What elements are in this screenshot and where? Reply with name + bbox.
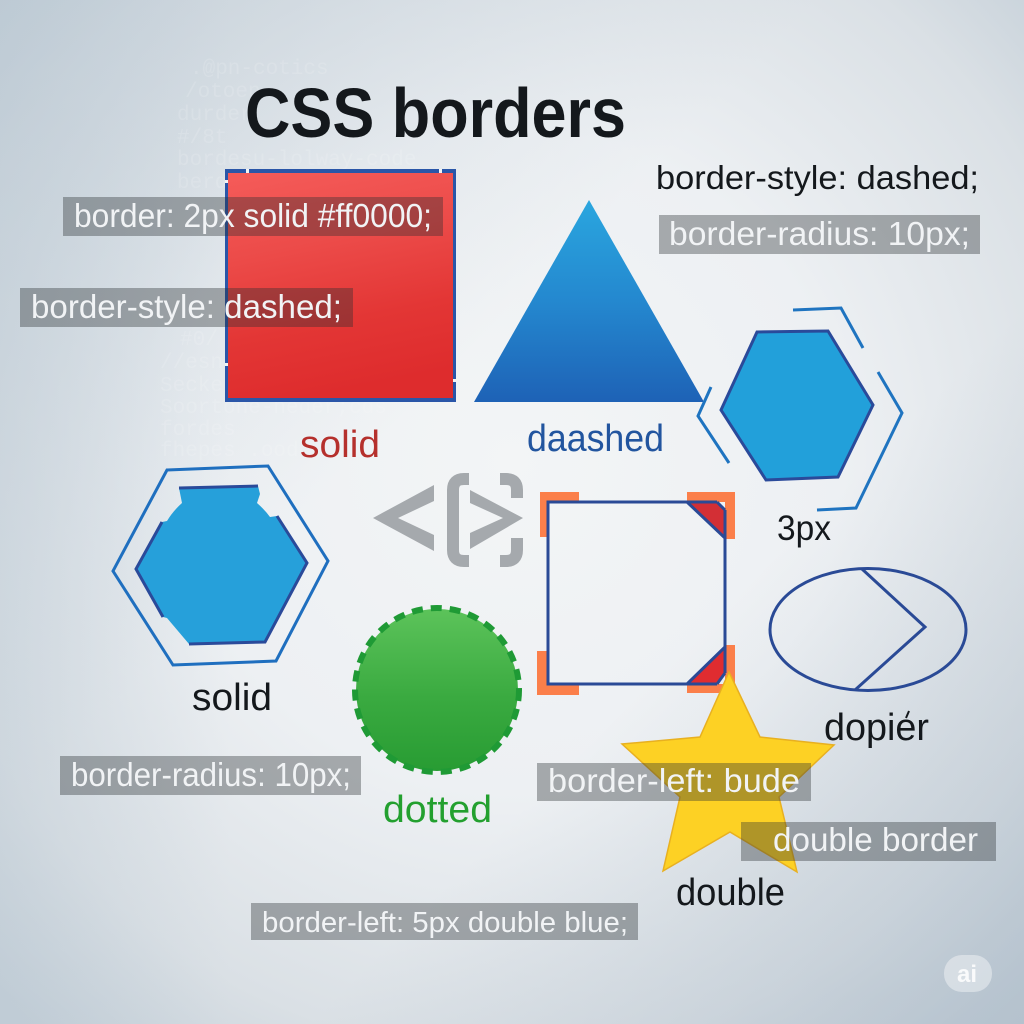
caption: double: double [676, 872, 785, 914]
badge: ai: ai [957, 961, 977, 988]
badge: ai [944, 955, 992, 992]
square with orange corners and red triangles [537, 492, 735, 695]
faint code backdrop: //esne [160, 352, 236, 375]
blue triangle [474, 200, 704, 402]
caption: solid red: solid [300, 424, 380, 466]
label: border-radius top right: border-radius: 10px; [669, 215, 970, 252]
label: border 2px solid: border: 2px solid #ff0000; [74, 197, 432, 234]
faint code backdrop: Secker [160, 375, 236, 398]
yellow star [622, 672, 834, 872]
caption: solid black: solid [192, 677, 272, 719]
caption: 3px: 3px [777, 509, 831, 548]
faint code backdrop: /otoen [185, 81, 261, 104]
faint code backdrop: bordesu-lolway-code [177, 149, 416, 172]
faint code backdrop: #0/ [180, 329, 218, 352]
label: double border: double border [773, 821, 978, 858]
caption: dopier: dopier [824, 707, 929, 749]
label: border-left 5px double blue: border-left: 5px double blue; [262, 907, 628, 939]
caption: dotted: dotted [383, 789, 492, 831]
label: border-left bude: border-left: bude [548, 762, 800, 799]
faint code backdrop: #/8t [177, 127, 227, 150]
green circle with dashed border [355, 608, 519, 772]
heading: border-style dashed: border-style: dashed; [656, 159, 979, 196]
right hexagon with broken outline [698, 308, 902, 510]
faint code backdrop: durder [177, 104, 253, 127]
faint code backdrop: fordes [160, 419, 236, 442]
red square with blue border [225, 169, 456, 402]
faint code backdrop: berd [177, 172, 227, 195]
icon: code brackets [373, 479, 523, 561]
label: border-style dashed: border-style: dashed; [31, 288, 342, 325]
faint code backdrop: Soortone-neder;cds [160, 397, 387, 420]
ellipse with chevron [770, 568, 966, 690]
label: border-radius lower left: border-radius: 10px; [71, 756, 351, 793]
faint code backdrop [160, 58, 416, 463]
caption: daashed: daashed [527, 418, 664, 460]
faint code backdrop: .@pn-cotics [190, 58, 329, 81]
faint code backdrop: fhepes .ood; [160, 440, 311, 463]
title: CSS borders [245, 74, 626, 152]
left hexagon with double outline [113, 466, 328, 665]
